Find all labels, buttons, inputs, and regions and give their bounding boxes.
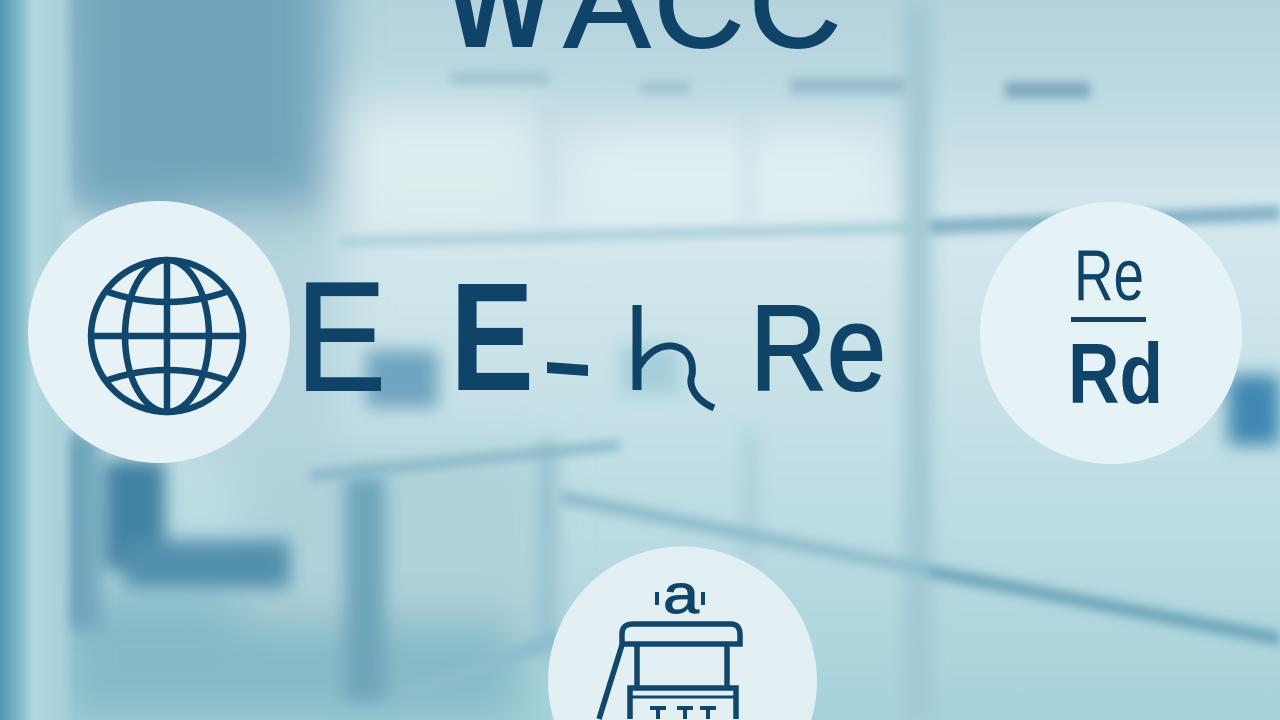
numerator: Re — [1074, 236, 1144, 316]
panel: building circle — [548, 546, 817, 720]
icon: globe — [91, 260, 243, 412]
denominator: Rd — [1068, 327, 1163, 422]
dash — [547, 362, 588, 376]
icon: building — [599, 624, 740, 719]
label a: a — [663, 563, 699, 625]
fraction bar — [1071, 317, 1146, 322]
title — [446, 0, 841, 74]
letter h — [632, 305, 642, 390]
formula letters: E — [296, 250, 386, 423]
panel: globe circle — [28, 201, 290, 463]
formula letters — [296, 250, 886, 423]
label a — [655, 563, 705, 625]
formula letters: E — [450, 251, 534, 423]
formula letters: Re — [750, 280, 886, 416]
panel: ratio circle — [980, 202, 1242, 464]
